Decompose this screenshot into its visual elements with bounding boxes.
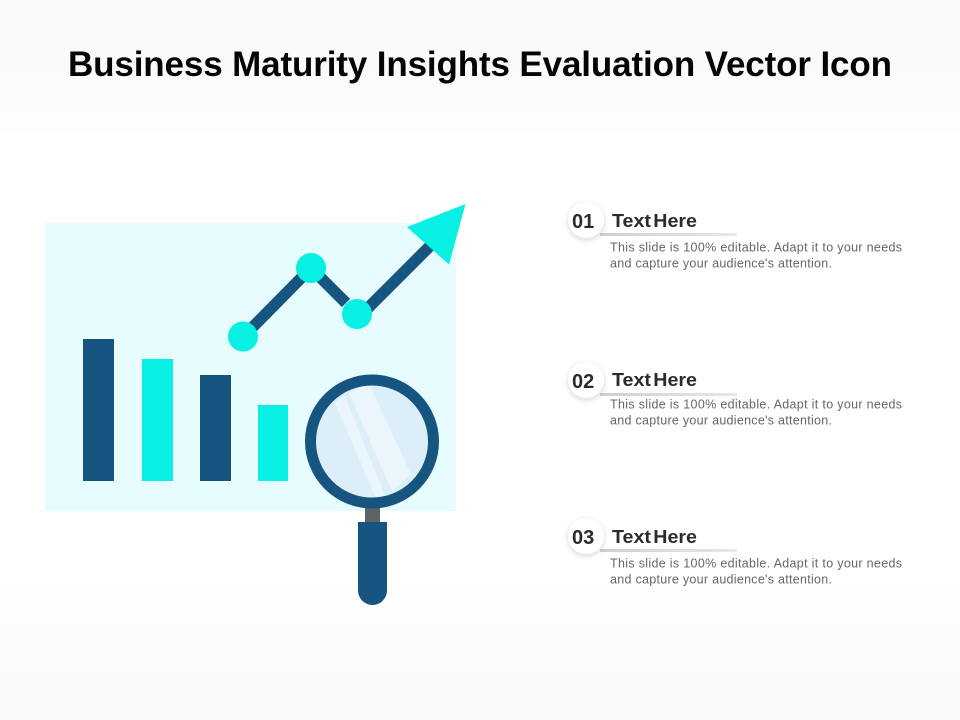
item 02: 02 [572,371,594,393]
item 01: and capture your audience's attention. [610,256,832,270]
item 01: This slide is 100% editable. Adapt it to your needs [610,240,902,254]
item 01 [568,202,902,270]
item 03 [568,518,902,586]
item 02: Text Here [612,369,697,390]
item 02 [568,362,902,428]
item 02: This slide is 100% editable. Adapt it to your needs [610,398,902,412]
item 03: and capture your audience's attention. [610,572,832,586]
item 01: 01 [572,211,594,233]
title: Business Maturity Insights Evaluation Vector Icon [68,45,892,84]
item 03: 03 [572,527,594,549]
item 01: Text Here [612,210,697,231]
item 03: This slide is 100% editable. Adapt it to your needs [610,556,902,570]
infographic canvas [45,50,902,605]
bar chart [83,339,288,481]
icon: magnifying glass [310,380,434,605]
trend line with arrow [228,204,466,352]
item 02: and capture your audience's attention. [610,414,832,428]
item 03: Text Here [612,526,697,547]
panel: chart background [45,223,456,511]
